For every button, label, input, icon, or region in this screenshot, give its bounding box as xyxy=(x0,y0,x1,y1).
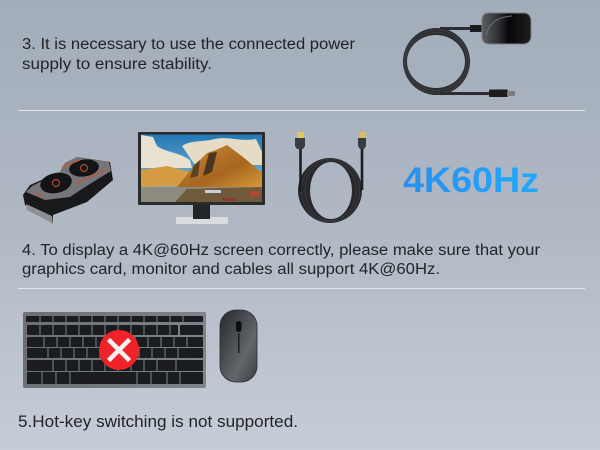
text: step 3: 3. It is necessary to use the connected power xyxy=(22,36,355,53)
label: 4K60Hz: 4K60Hz xyxy=(403,161,539,200)
icon: HDMI cable xyxy=(295,132,366,223)
text: step 3 xyxy=(22,36,355,73)
text: step 4 xyxy=(22,242,540,278)
divider xyxy=(18,288,585,290)
icon: red cross xyxy=(99,330,139,370)
icon: keyboard xyxy=(23,312,206,388)
divider xyxy=(18,110,585,112)
text: step 4: graphics card, monitor and cables all support 4K@60Hz. xyxy=(22,261,440,278)
text: step 5: 5.Hot-key switching is not supported. xyxy=(18,412,298,431)
icon: graphics card xyxy=(23,157,113,224)
icon: power supply with cable xyxy=(403,13,531,97)
icon: mouse xyxy=(220,310,257,382)
text: step 4: 4. To display a 4K@60Hz screen correctly, please make sure that your xyxy=(22,242,540,259)
icon: monitor with landscape xyxy=(138,132,265,224)
text: step 3: supply to ensure stability. xyxy=(22,56,212,73)
